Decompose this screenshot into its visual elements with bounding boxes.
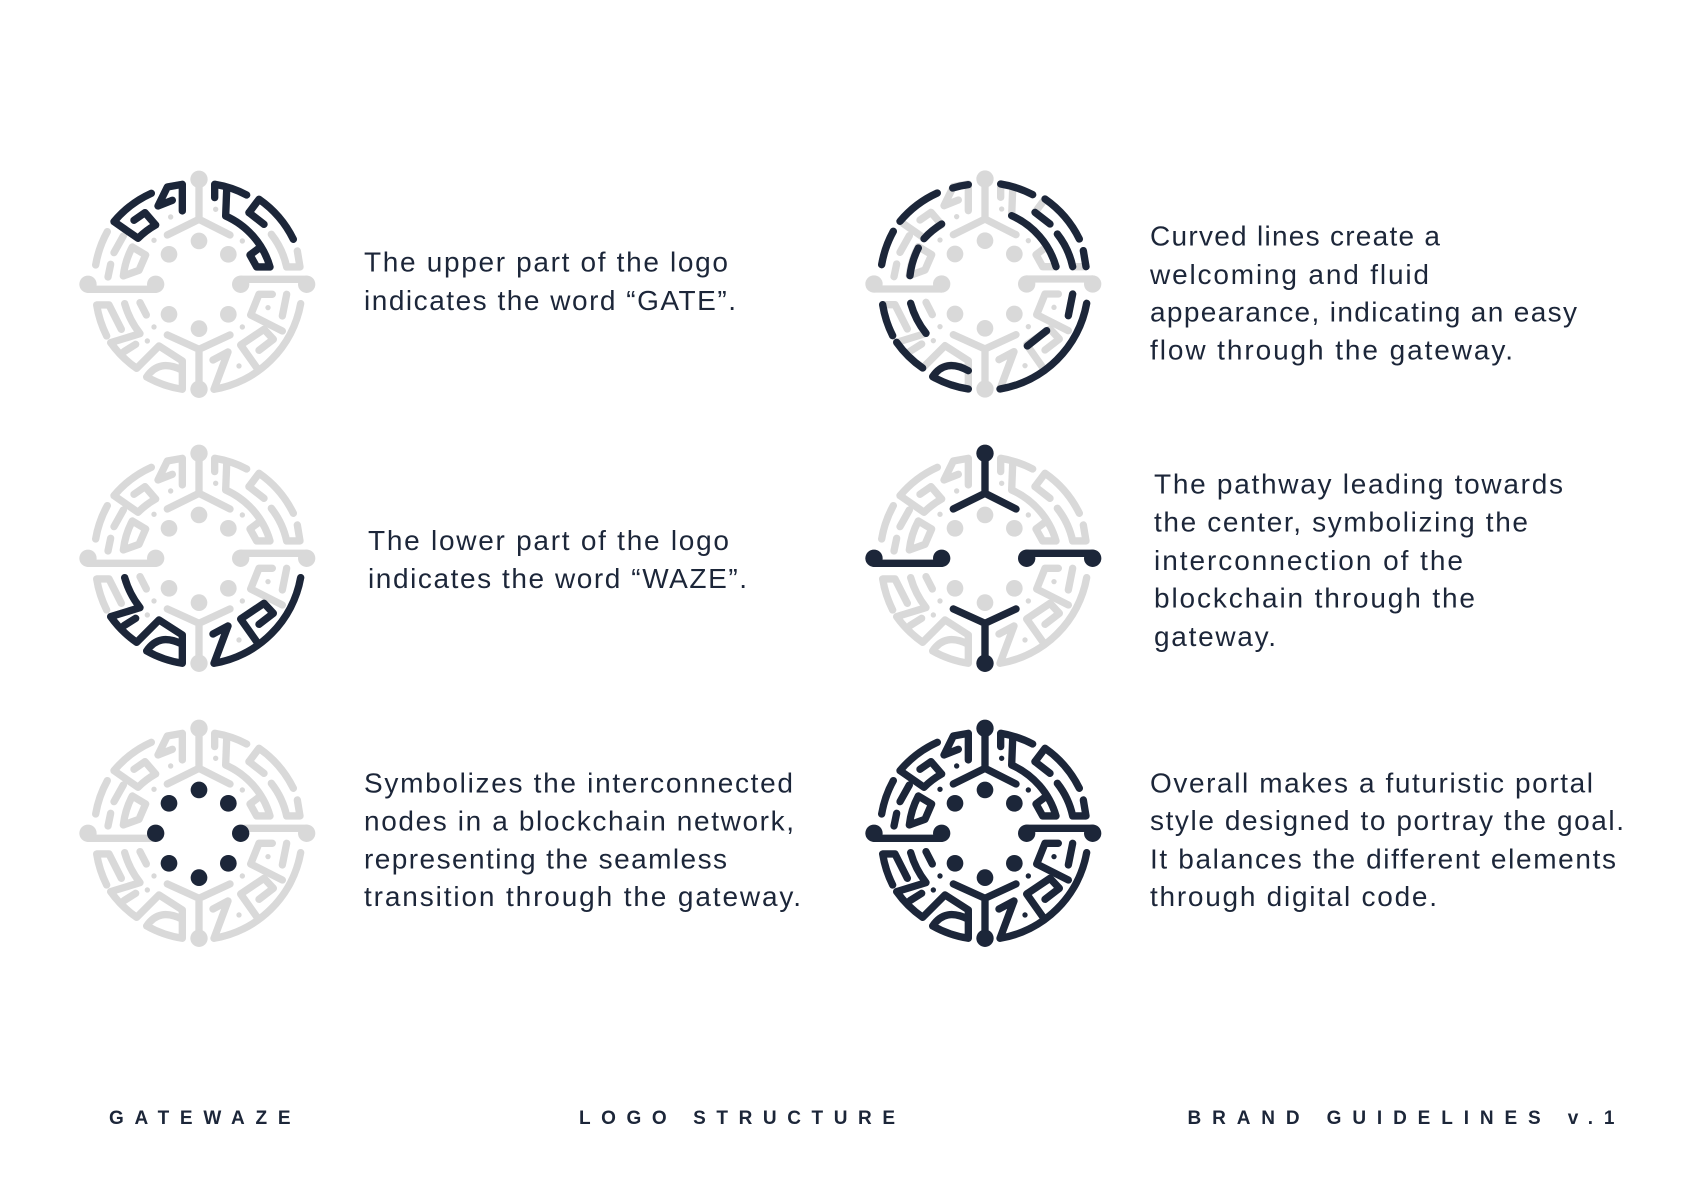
text: WAZE description: The lower part of the logo bbox=[368, 525, 729, 556]
text: WAZE description bbox=[368, 525, 747, 594]
footer: brand name: GATEWAZE bbox=[109, 1108, 290, 1129]
text: pathway description: The pathway leading towards bbox=[1154, 468, 1563, 499]
logo: curved lines highlighted bbox=[865, 170, 1101, 398]
text: nodes description: nodes in a blockchain network, bbox=[364, 806, 794, 837]
text: curved lines description: appearance, indicating an easy bbox=[1150, 297, 1577, 328]
text: nodes description: transition through the gateway. bbox=[364, 881, 801, 912]
text: GATE description: The upper part of the logo bbox=[364, 247, 728, 278]
logo: full dark mark bbox=[865, 720, 1101, 947]
text: curved lines description bbox=[1149, 221, 1577, 365]
text: curved lines description: welcoming and fluid bbox=[1149, 259, 1429, 290]
text: GATE description: indicates the word “GATE”. bbox=[364, 285, 736, 316]
text: overall description: through digital code. bbox=[1150, 881, 1437, 912]
text: overall description: style designed to portray the goal. bbox=[1150, 805, 1624, 836]
text: GATE description bbox=[364, 247, 736, 316]
logo: pathway highlighted bbox=[865, 445, 1101, 672]
logo: nodes highlighted bbox=[79, 720, 315, 947]
text: pathway description: blockchain through the bbox=[1154, 583, 1475, 614]
text: overall description: Overall makes a futuristic portal bbox=[1150, 767, 1593, 798]
text: pathway description: interconnection of the bbox=[1154, 545, 1463, 576]
footer: document title: BRAND GUIDELINES v.1 bbox=[1188, 1108, 1615, 1129]
text: overall description bbox=[1150, 767, 1624, 912]
text: pathway description: gateway. bbox=[1154, 621, 1276, 652]
text: curved lines description: flow through the gateway. bbox=[1150, 334, 1513, 365]
text: nodes description: representing the seamless bbox=[364, 843, 727, 874]
text: nodes description: Symbolizes the interconnected bbox=[364, 767, 793, 798]
logo: upper part GATE highlighted bbox=[79, 171, 315, 398]
text: pathway description bbox=[1154, 468, 1563, 652]
logo: lower part WAZE highlighted bbox=[79, 445, 315, 672]
text: pathway description: the center, symbolizing the bbox=[1154, 507, 1528, 538]
text: overall description: It balances the different elements bbox=[1150, 843, 1616, 874]
footer: section title: LOGO STRUCTURE bbox=[579, 1108, 895, 1129]
text: curved lines description: Curved lines create a bbox=[1150, 221, 1440, 252]
text: WAZE description: indicates the word “WAZE”. bbox=[368, 563, 747, 594]
text: nodes description bbox=[364, 767, 801, 912]
